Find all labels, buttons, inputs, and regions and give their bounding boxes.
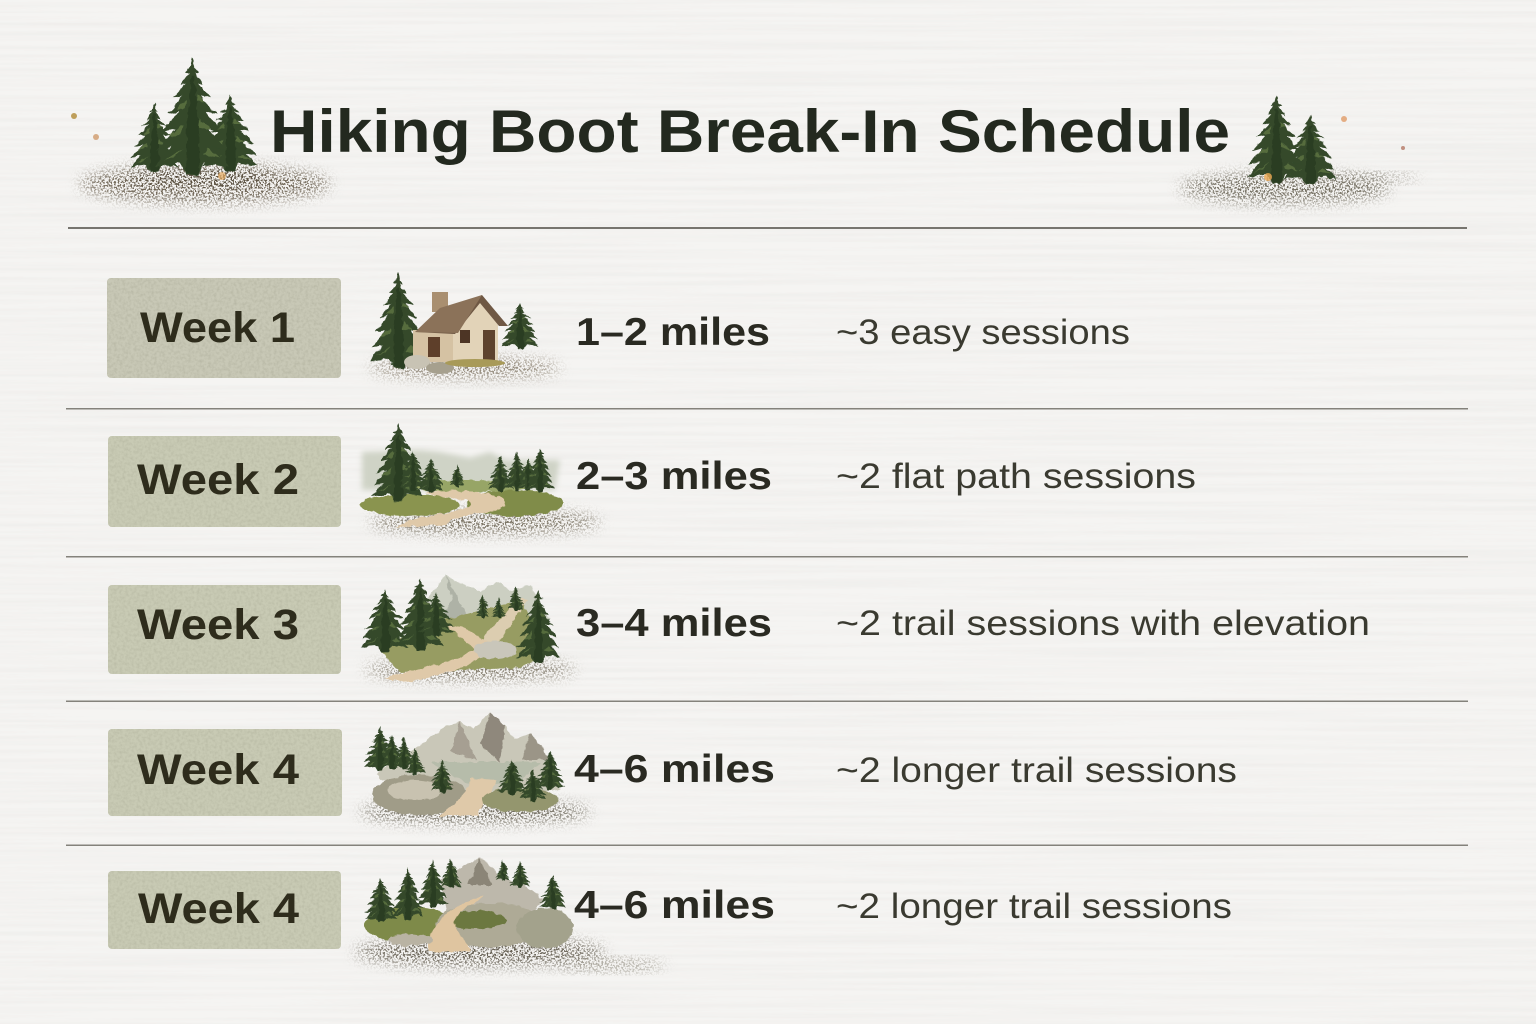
distance: 1-2 miles: 1–2 miles [576,311,770,354]
rule [66,700,1468,702]
sessions: week 4: ~2 longer trail sessions [836,751,1237,790]
badge: week 4: Week 4 [137,746,299,794]
sessions: week 3: ~2 trail sessions with elevation [836,604,1370,643]
badge: week 1 [107,278,341,378]
ground speckle left [80,165,330,203]
ground speckle right [1180,173,1420,203]
badge: week 4 repeat [108,871,341,949]
ember dots left [71,113,226,180]
badge: week 4 repeat: Week 4 [138,885,299,933]
distance: 4-6 miles repeat: 4–6 miles [574,884,775,927]
row 4: week 4 [108,713,1237,823]
sessions: week 1: ~3 easy sessions [836,313,1130,352]
ember dots right [1264,116,1405,181]
title: Hiking Boot Break-In Schedule [270,98,1230,165]
row 3: week 3 [108,575,1370,682]
header rule [68,227,1467,229]
badge: week 1: Week 1 [140,304,295,352]
badge: week 3: Week 3 [137,601,299,649]
illustration: flat forest path [360,423,600,533]
illustration: cabin among pines [370,272,560,377]
sessions: week 4 repeat: ~2 longer trail sessions [836,887,1232,926]
rule [66,844,1468,846]
distance: 3-4 miles: 3–4 miles [576,602,772,645]
distance: 4-6 miles: 4–6 miles [574,748,775,791]
right pine cluster [1247,95,1337,184]
row 1: week 1 [107,272,1130,378]
rule [66,408,1468,410]
header decoration: right pine trees [1180,95,1420,203]
distance: 2-3 miles: 2–3 miles [576,455,772,498]
row 2: week 2 [108,423,1196,533]
header decoration: left pine trees [71,58,330,203]
sessions: week 2: ~2 flat path sessions [836,457,1196,496]
badge: week 2 [108,436,341,527]
illustration: rocky mountain trail [360,713,590,823]
illustration: dense forest ridge trail [355,857,665,969]
illustration: elevated trail with peaks [360,575,575,682]
rule [66,556,1468,558]
badge: week 2: Week 2 [137,456,299,504]
row 5: week 4 repeat [108,857,1232,969]
badge: week 3 [108,585,341,674]
badge: week 4 [108,729,342,816]
left pine cluster [130,58,258,175]
